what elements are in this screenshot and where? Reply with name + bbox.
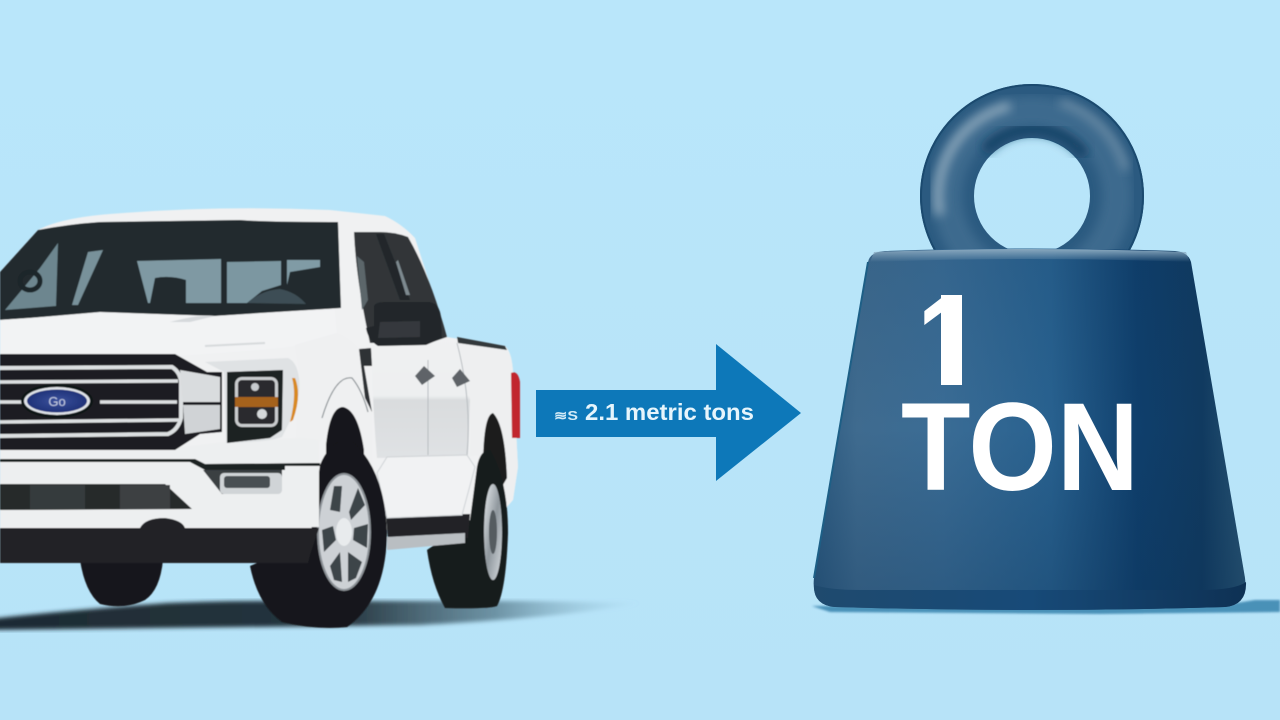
under body dark <box>386 514 470 540</box>
arrow <box>536 344 801 481</box>
left quarter glass <box>5 243 58 310</box>
weight body <box>814 248 1246 610</box>
rear window glass <box>137 259 221 303</box>
side mirror <box>366 302 442 346</box>
truck ground shadow <box>0 601 642 630</box>
taillight <box>511 372 520 438</box>
fog light <box>203 470 282 494</box>
side window <box>354 232 447 343</box>
fender vent <box>359 348 372 412</box>
headlight <box>205 358 299 443</box>
oval badge <box>21 384 93 418</box>
one-ton weight <box>814 85 1246 610</box>
weight label: TON: TON <box>901 378 1139 517</box>
fender <box>295 333 372 470</box>
steering wheel <box>247 289 306 304</box>
bed rail <box>457 337 507 350</box>
front wheel <box>250 440 387 628</box>
hood <box>0 310 337 356</box>
rear bed panel <box>458 342 518 500</box>
pickup truck <box>0 208 520 628</box>
arrow label: ≋S <box>554 408 578 423</box>
door seams <box>428 343 468 455</box>
truck body <box>0 208 518 608</box>
front wheel arch <box>326 407 364 470</box>
weight ground shadow <box>812 600 1280 614</box>
rear wheel arch <box>483 413 507 490</box>
lower valance <box>0 518 319 563</box>
front bumper <box>0 438 320 527</box>
rear wheel <box>427 450 508 608</box>
weight label: 1: 1 <box>917 270 977 413</box>
weight ring <box>920 84 1144 250</box>
oval badge: Go <box>48 394 66 409</box>
weight label: 1 <box>924 295 962 385</box>
windshield <box>0 220 341 320</box>
rocker panel <box>377 455 475 518</box>
running board <box>387 533 465 550</box>
door panel <box>372 338 470 458</box>
front inner wheel <box>80 560 163 606</box>
arrow label: 2.1 metric tons <box>585 399 754 425</box>
door handles <box>415 366 470 387</box>
infographic canvas <box>0 84 1280 633</box>
grille <box>0 354 222 450</box>
